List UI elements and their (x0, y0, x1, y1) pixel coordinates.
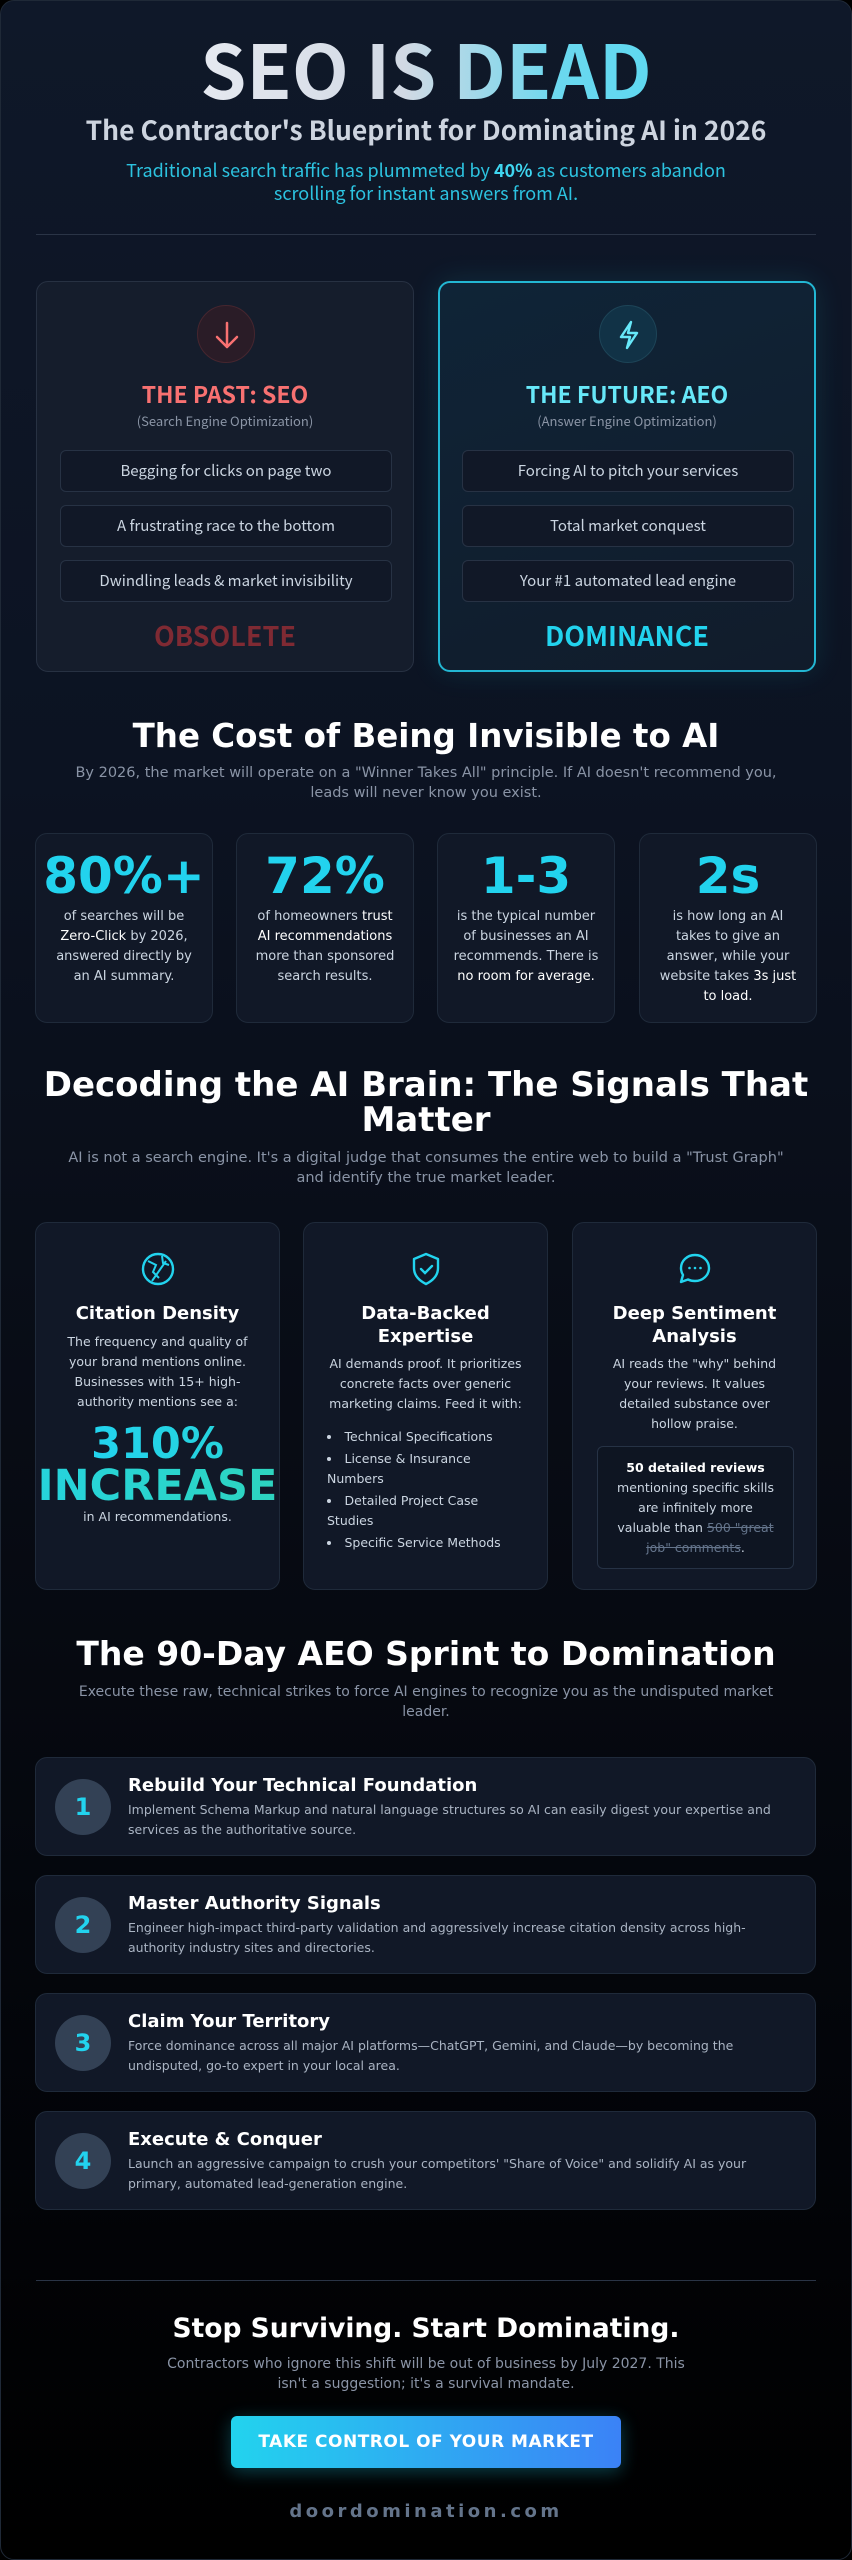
icon: down arrow (197, 305, 255, 363)
step 4: Launch an aggressive campaign to crush your competitors' "Share of Voice" and solidify AI as your primary, automated lead-generation engine. (128, 2156, 746, 2191)
text: CTA: Contractors who ignore this shift will be out of business by July 2027. This (167, 2356, 685, 2372)
list (327, 1429, 501, 1550)
heading: CTA: Stop Surviving. Start Dominating. (173, 2313, 679, 2344)
heading: decoding (44, 1065, 808, 1140)
title: Citation Density (76, 1303, 239, 1324)
heading: future: THE FUTURE: AEO (526, 376, 728, 410)
step 2 (35, 1875, 816, 1974)
step 1: Implement Schema Markup and natural language structures so AI can easily digest your expertise and services as the authoritative source. (128, 1802, 771, 1837)
item (60, 450, 392, 492)
text: in AI recommendations. (83, 1509, 232, 1524)
heading: decoding: Decoding the AI Brain: The Signals That (44, 1065, 808, 1105)
text: cost intro: leads will never know you exist. (310, 785, 542, 801)
callout: reviews: 50 detailed reviews mentioning specific skills are infinitely more valuable than 500 "great job" comments. (617, 1460, 774, 1555)
title: Data-Backed (361, 1303, 490, 1324)
item: Your #1 automated lead engine (520, 570, 736, 591)
item: Begging for clicks on page two (120, 460, 332, 481)
stat card 1: 80%+ (43, 847, 205, 905)
button: TAKE CONTROL OF YOUR MARKET (258, 2432, 594, 2452)
text: cost intro: By 2026, the market will operate on a "Winner Takes All" principle. If AI doesn't recommend you, (75, 765, 777, 781)
icon: shield (412, 1252, 440, 1286)
panel: future AEO (438, 281, 816, 672)
step 3: Claim Your Territory (128, 2011, 330, 2032)
heading: cost: The Cost of Being Invisible to AI (133, 717, 719, 755)
list: License & Insurance Numbers (327, 1451, 471, 1486)
text: The frequency and quality of your brand mentions online. Businesses with 15+ high-authority mentions see a: (67, 1334, 248, 1409)
title: Deep Sentiment (613, 1303, 776, 1324)
subheading: (Search Engine Optimization) (137, 411, 313, 430)
stat card 4 (639, 833, 817, 1023)
text: sprint intro: Execute these raw, technical strikes to force AI engines to recognize you as the undisputed market leader. (79, 1684, 773, 1720)
panel: deep sentiment (572, 1222, 817, 1590)
step 4: Execute & Conquer (128, 2129, 322, 2150)
text: AI demands proof. It prioritizes concrete facts over generic marketing claims. Feed it with: (329, 1356, 522, 1411)
item: Total market conquest (550, 515, 706, 536)
item: A frustrating race to the bottom (117, 515, 335, 536)
icon: lightning (599, 305, 657, 363)
list: Technical Specifications (344, 1429, 493, 1444)
item: Forcing AI to pitch your services (518, 460, 738, 481)
callout: reviews (597, 1446, 794, 1569)
label: obsolete: OBSOLETE (154, 615, 296, 654)
stat card 3 (437, 833, 615, 1023)
footer url: doordomination.com (289, 2501, 563, 2522)
step 4 (35, 2111, 816, 2210)
text: cost intro (75, 765, 777, 801)
text: CTA: isn't a suggestion; it's a survival mandate. (277, 2376, 575, 2392)
label: dominance: DOMINANCE (545, 615, 709, 654)
text: decoding intro: and identify the true market leader. (296, 1170, 556, 1186)
big stat: 310% increase (38, 1419, 277, 1511)
item (462, 450, 794, 492)
title: Analysis (652, 1326, 737, 1347)
stat card 4: is how long an AI takes to give an answer, while your website takes 3s just to load. (660, 909, 796, 1004)
button (231, 2416, 621, 2468)
list: Specific Service Methods (344, 1535, 501, 1550)
stat card 1: of searches will be Zero-Click by 2026, answered directly by an AI summary. (56, 909, 192, 984)
stat card 2 (236, 833, 414, 1023)
item (60, 505, 392, 547)
tagline (126, 157, 726, 206)
item (462, 560, 794, 602)
heading: decoding: Matter (361, 1100, 491, 1140)
panel: data-backed expertise (303, 1222, 548, 1590)
stat card 3: is the typical number of businesses an AI recommends. There is no room for average. (454, 909, 598, 984)
title (613, 1303, 776, 1347)
text: AI reads the "why" behind your reviews. It values detailed substance over hollow praise. (613, 1356, 776, 1431)
stat card 1 (35, 833, 213, 1023)
icon: globe (142, 1252, 174, 1286)
step 1 (35, 1757, 816, 1856)
step 3 (35, 1993, 816, 2092)
tagline: Traditional search traffic has plummeted by 40% as customers abandon (126, 157, 726, 183)
step 4: 4 (75, 2147, 91, 2175)
text: decoding intro: AI is not a search engine. It's a digital judge that consumes the entire web to build a "Trust Graph" (68, 1150, 784, 1166)
item (462, 505, 794, 547)
step 2: 2 (75, 1911, 91, 1939)
step 1: Rebuild Your Technical Foundation (128, 1775, 477, 1796)
title: SEO IS DEAD (200, 14, 652, 121)
panel: citation density (35, 1222, 280, 1590)
subheading: (Answer Engine Optimization) (537, 411, 717, 430)
item: Dwindling leads & market invisibility (99, 570, 353, 591)
tagline: scrolling for instant answers from AI. (274, 180, 578, 206)
title (361, 1303, 490, 1347)
step 2: Master Authority Signals (128, 1893, 381, 1914)
big stat: 310% increase: INCREASE (38, 1461, 277, 1511)
stat card 3: 1-3 (481, 847, 571, 905)
list: Detailed Project Case Studies (327, 1493, 478, 1528)
step 3: Force dominance across all major AI platforms—ChatGPT, Gemini, and Claude—by becoming the undisputed, go-to expert in your local area. (128, 2038, 733, 2073)
stat card 2: 72% (265, 847, 385, 905)
stat card 2: of homeowners trust AI recommendations more than sponsored search results. (256, 909, 394, 984)
stat card 4: 2s (696, 847, 760, 905)
step 1: 1 (75, 1793, 91, 1821)
item (60, 560, 392, 602)
panel: past SEO (36, 281, 414, 672)
subtitle: The Contractor's Blueprint for Dominating AI in 2026 (86, 109, 766, 148)
step 3: 3 (75, 2029, 91, 2057)
heading: past: THE PAST: SEO (142, 376, 308, 410)
icon: chat (680, 1254, 710, 1284)
big stat: 310% increase: 310% (91, 1419, 224, 1469)
text: decoding intro (68, 1150, 784, 1186)
text: CTA (167, 2356, 685, 2392)
step 2: Engineer high-impact third-party validation and aggressively increase citation density across high-authority industry sites and directories. (128, 1920, 746, 1955)
title: Expertise (378, 1326, 473, 1347)
heading: sprint: The 90-Day AEO Sprint to Domination (76, 1634, 776, 1673)
